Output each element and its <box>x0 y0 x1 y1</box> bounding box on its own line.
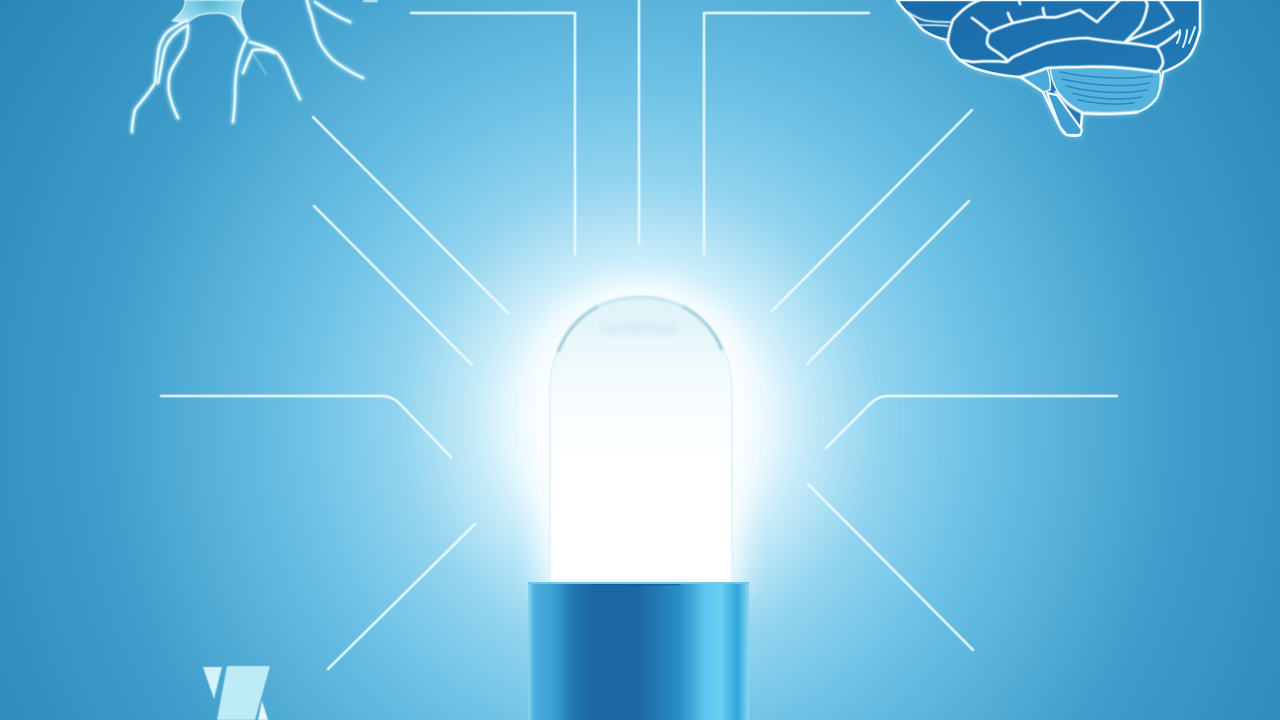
frontal folds <box>908 12 950 26</box>
connector: upper left diagonal <box>313 117 508 313</box>
connector: second left diagonal <box>314 206 472 365</box>
capsule glass body <box>550 297 732 583</box>
brain silhouette <box>897 0 1200 136</box>
connector: left elbow <box>161 396 451 457</box>
capsule glass top rim <box>598 297 682 306</box>
capsule base top edge <box>528 582 749 584</box>
cerebellum folds <box>1060 72 1152 104</box>
fragment: parallelogram <box>217 666 270 720</box>
connector: top centre <box>638 0 640 244</box>
fragment: triangle <box>203 667 222 699</box>
neuron faint branch <box>254 55 266 74</box>
connector: upper right diagonal <box>772 110 972 311</box>
occipital ribs <box>1177 27 1195 47</box>
neuron dendrites <box>132 0 363 132</box>
upper folds <box>972 0 1045 32</box>
capsule inner reflection <box>600 322 678 335</box>
capsule base top shadow <box>590 584 680 586</box>
connector lines <box>161 0 1117 669</box>
brain outer glow <box>897 0 1200 135</box>
capsule blue base <box>528 583 749 720</box>
brain folds <box>948 0 1178 77</box>
icon: brain <box>897 0 1200 136</box>
capsule <box>528 288 749 720</box>
cerebellum lower highlight <box>1056 92 1137 114</box>
temporal lobe edge <box>948 0 1163 77</box>
brain stem upper <box>1022 68 1050 92</box>
fragment: sliver <box>258 701 268 720</box>
right folds <box>1125 0 1178 47</box>
connector: lower left diagonal <box>328 524 475 669</box>
connector: top right elbow <box>704 13 869 254</box>
neuron axon fragment <box>364 0 377 2</box>
capsule glass left shoulder <box>558 306 598 352</box>
connector: lower right diagonal <box>808 484 973 650</box>
cerebellum <box>1050 67 1160 114</box>
connector: top left elbow <box>411 13 575 254</box>
middle lobe fold <box>987 0 1120 60</box>
capsule glass right shoulder <box>682 306 722 350</box>
neuron cell body <box>172 0 247 39</box>
neuron glow <box>132 0 363 132</box>
icon: neuron <box>132 0 377 132</box>
connector: right elbow <box>826 396 1117 448</box>
brain stem lower <box>1047 93 1082 135</box>
capsule halo <box>541 288 741 590</box>
connector: second right diagonal <box>807 201 969 364</box>
icon: lightning fragment <box>203 666 270 720</box>
